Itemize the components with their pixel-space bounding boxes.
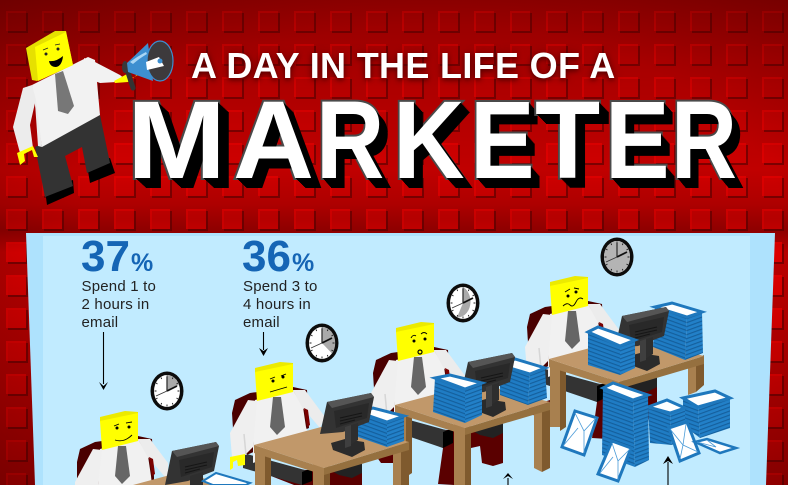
email piles on the floor [562,383,736,481]
stat: 37 percent: Spend 1 to [82,278,156,295]
worker one: smiling at desk [75,411,250,485]
title word: marketer: M [126,79,225,202]
stat: 37 percent: 37 [81,232,130,281]
arrow: 36 percent down [259,332,268,356]
stat: 37 percent [81,232,156,331]
panel: light blue office wall [26,233,775,485]
arrow: floor pile up [663,456,673,485]
stat: 37 percent: 2 hours in [82,296,149,313]
loose envelope [669,422,699,461]
title line: a day in the life of a: A DAY IN THE LIFE OF A [191,45,616,86]
loose envelope [598,441,631,481]
arrow: center up [503,473,513,485]
title word: marketer: E [605,79,670,202]
arrow: 37 percent down [99,332,108,390]
title word: marketer: R [671,79,737,202]
stat: 37 percent: email [82,314,118,331]
clock: worker four [600,238,634,276]
stat: 37 percent: % [131,249,153,277]
worker two: neutral at desk [230,362,409,485]
stat: 36 percent [242,232,318,331]
icon: megaphone [122,41,173,88]
title word: marketer [126,79,744,202]
title word: marketer: K [393,79,464,202]
title word: marketer: E [470,79,535,202]
stat: 36 percent: email [243,314,280,331]
worker four: overwhelmed at desk [525,276,704,439]
mascot with megaphone [13,31,173,205]
stat: 36 percent: 4 hours in [243,296,311,313]
title word: marketer: R [316,79,385,202]
stat: 36 percent: Spend 3 to [243,278,318,295]
stat: 36 percent: % [292,249,314,277]
worker three: surprised at desk [371,322,550,485]
title word: marketer: T [535,79,600,202]
clock: worker three [446,284,480,322]
title word: marketer: A [233,79,314,202]
clock: worker one [150,372,184,410]
loose envelope [695,439,736,453]
clock: worker two [306,324,338,362]
stat: 36 percent: 36 [242,232,291,281]
loose envelope [562,411,597,455]
